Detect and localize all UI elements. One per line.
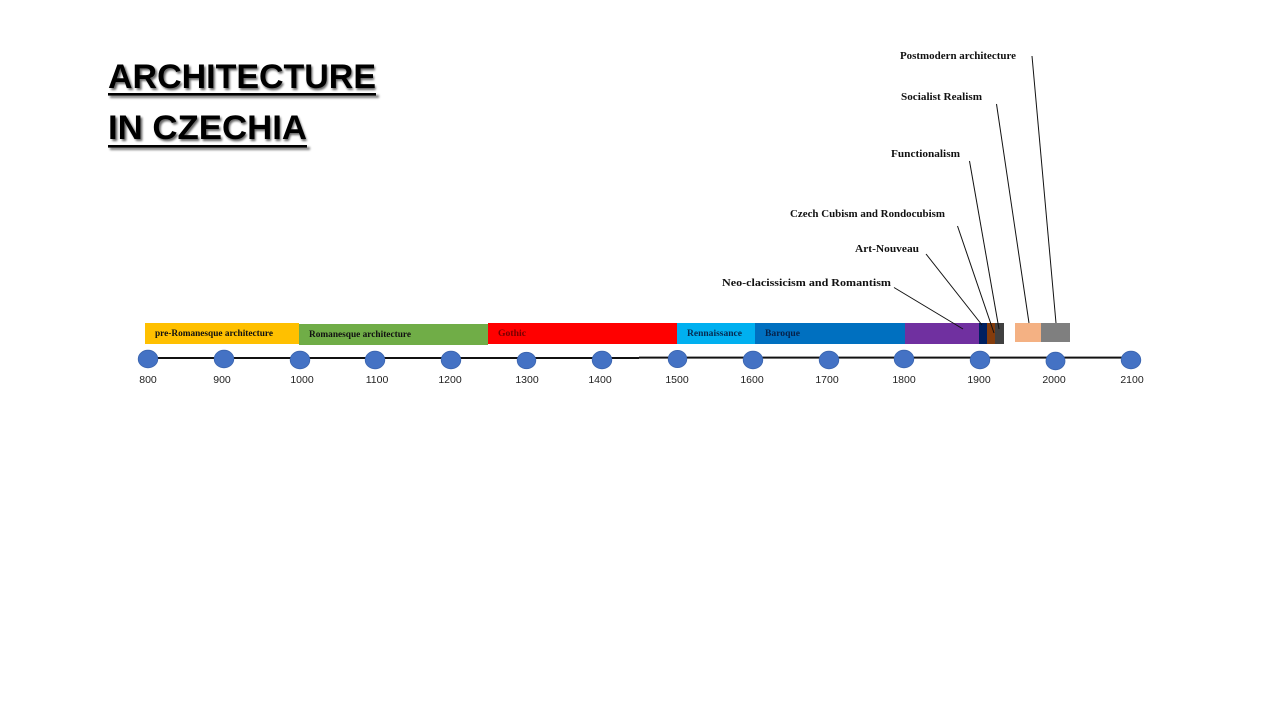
year labels: 2100	[1120, 374, 1144, 386]
callout: Functionalism	[891, 148, 999, 329]
callout: Postmodern architecture	[900, 50, 1056, 323]
year labels: 800	[139, 374, 157, 386]
bar: Art-Nouveau	[979, 323, 987, 344]
bar: Baroque: Baroque	[765, 329, 800, 339]
marker: 900	[214, 350, 234, 368]
title: IN CZECHIA	[108, 109, 307, 147]
callout: Czech Cubism and Rondocubism	[790, 208, 994, 333]
callout labels and leader lines	[722, 50, 1056, 333]
bar: Gothic: Gothic	[498, 329, 526, 339]
callout: Socialist Realism: Socialist Realism	[901, 91, 982, 103]
year labels: 2000	[1042, 374, 1066, 386]
callout: Neo-clacissicism and Romantism: Neo-clacissicism and Romantism	[722, 277, 891, 289]
year labels: 1200	[438, 374, 462, 386]
bar: Romanesque architecture	[299, 324, 488, 345]
marker: 1300	[517, 352, 536, 369]
year labels	[139, 374, 1144, 386]
bar: Rennaissance: Rennaissance	[687, 329, 742, 339]
callout: Art-Nouveau: Art-Nouveau	[855, 243, 919, 255]
marker: 1100	[365, 351, 385, 369]
callout: Functionalism: Functionalism	[891, 148, 960, 160]
callout: Art-Nouveau	[855, 243, 982, 325]
year labels: 1400	[588, 374, 612, 386]
title	[108, 58, 379, 150]
bar: Gothic	[488, 323, 677, 344]
marker: 1400	[592, 351, 612, 369]
marker: 1700	[819, 351, 839, 369]
title: ARCHITECTURE	[110, 60, 377, 98]
year labels: 1500	[665, 374, 689, 386]
year labels: 1600	[740, 374, 764, 386]
callout: Postmodern architecture: Postmodern architecture	[900, 50, 1016, 62]
bar: Socialist Realism	[1015, 323, 1041, 342]
marker: 800	[138, 350, 158, 368]
year labels: 900	[213, 374, 231, 386]
callout: Neo-clacissicism and Romantism	[722, 277, 963, 329]
year labels: 1900	[967, 374, 991, 386]
timeline markers	[138, 350, 1141, 370]
bar: Baroque	[755, 323, 905, 344]
callout: Czech Cubism and Rondocubism: Czech Cubism and Rondocubism	[790, 208, 945, 220]
bar: pre-Romanesque architecture: pre-Romanesque architecture	[155, 329, 273, 339]
marker: 1600	[743, 351, 763, 369]
year labels: 1000	[290, 374, 314, 386]
bar: Neo-clacissicism and Romantism	[905, 323, 979, 344]
marker: 1900	[970, 351, 990, 369]
marker: 2000	[1046, 352, 1065, 370]
bar: Rennaissance	[677, 323, 755, 344]
callout: Socialist Realism	[901, 91, 1029, 323]
year labels: 1300	[515, 374, 539, 386]
marker: 1500	[668, 350, 687, 368]
bar: Czech Cubism and Rondocubism	[987, 323, 995, 344]
bar: Postmodern architecture	[1041, 323, 1070, 342]
marker: 1800	[894, 350, 914, 368]
title: IN CZECHIA	[110, 111, 308, 149]
year labels: 1800	[892, 374, 916, 386]
year labels: 1100	[366, 374, 388, 386]
marker: 1200	[441, 351, 461, 369]
marker: 2100	[1121, 351, 1141, 369]
year labels: 1700	[815, 374, 839, 386]
bar: Romanesque architecture: Romanesque architecture	[309, 330, 411, 340]
timeline axis	[148, 357, 1131, 359]
bar: pre-Romanesque architecture	[145, 323, 299, 344]
era bars	[145, 323, 1070, 345]
bar: Functionalism	[995, 323, 1004, 344]
marker: 1000	[290, 351, 310, 369]
title: ARCHITECTURE	[108, 58, 376, 96]
